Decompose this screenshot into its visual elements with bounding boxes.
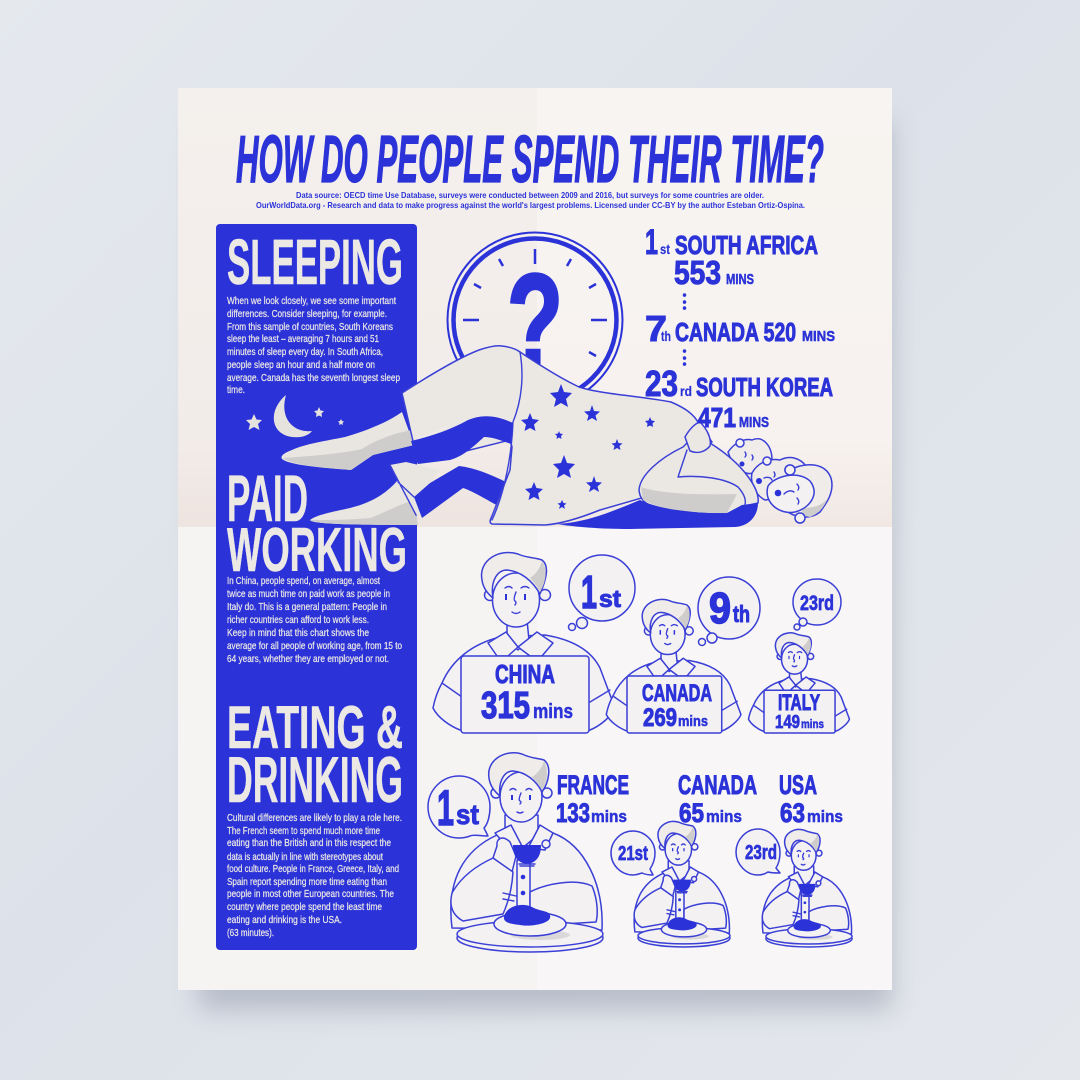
poster sheet (178, 88, 892, 990)
text block: paid working (227, 576, 402, 665)
ranking: sleeping (645, 223, 835, 433)
figure: italy worker: ITALY (778, 690, 820, 715)
text block: eating and drinking: (63 minutes). (227, 928, 274, 939)
panel: blue sidebar (216, 224, 417, 950)
lower trouser (412, 466, 508, 518)
text block: paid working: twice as much time on paid work as people in (227, 589, 390, 600)
figure: china worker: 315 (481, 685, 530, 727)
text block: paid working: Keep in mind that this chart shows the (227, 628, 369, 639)
figure: china worker: mins (533, 701, 573, 723)
poster shadow (198, 120, 892, 1010)
bubble: canada 9th: th (733, 601, 750, 627)
text block: sleeping: minutes of sleep every day. In South Africa, (227, 347, 383, 358)
text block: eating and drinking (227, 813, 402, 939)
rank 1 south africa (645, 223, 818, 291)
heading: paid working: PAID (227, 461, 308, 535)
rank 1 south africa: MINS (726, 271, 754, 288)
lower leg and foot (310, 480, 418, 525)
figure: usa eater (762, 829, 852, 947)
data source note: Data source: OECD time Use Database, surveys were conducted between 2009 and 2016, but surveys for some countries are older. (296, 190, 764, 200)
figure: canada eater (634, 821, 730, 947)
text block: sleeping: people sleep an hour and a half more on (227, 360, 375, 371)
illustration: sleeper under starry blanket (281, 346, 832, 529)
text block: paid working: In China, people spend, on average, almost (227, 576, 380, 587)
heading: paid working (227, 461, 407, 585)
label: usa: USA (779, 770, 817, 800)
figure: canada worker (606, 599, 741, 733)
rank 23 south korea: SOUTH KOREA (696, 372, 833, 402)
text block: eating and drinking: food culture. People in France, Greece, Italy, and (227, 864, 399, 875)
rank 23 south korea: rd (680, 383, 692, 399)
rank 23 south korea: MINS (739, 414, 769, 431)
label: france: 133 (556, 798, 590, 828)
label: canada: CANADA (678, 770, 757, 800)
upper trouser (411, 416, 513, 464)
arm and bent knee (639, 430, 758, 514)
figure: china worker (433, 552, 615, 733)
blanket (402, 346, 712, 525)
bubble: china 1st: 1 (581, 566, 597, 618)
bubble: france 1st: 1 (437, 780, 454, 836)
data source note (256, 190, 805, 210)
label: france: FRANCE (557, 770, 629, 800)
icon: clock with question mark (448, 232, 622, 408)
rank 23 south korea: 471 (698, 402, 736, 433)
figure: italy worker: 149 (775, 712, 800, 732)
rank 1 south africa: 553 (674, 254, 721, 291)
text block: paid working: 64 years, whether they are employed or not. (227, 654, 389, 665)
text block: eating and drinking: eating than the British and in this respect the (227, 838, 391, 849)
icon: moon and stars (246, 395, 344, 437)
back heads (728, 439, 808, 500)
label: usa (779, 770, 843, 828)
rank 7 canada: CANADA 520 (675, 317, 796, 347)
rank 23 south korea: 23 (645, 363, 678, 404)
text block: sleeping: differences. Consider sleeping, for example. (227, 309, 387, 320)
data source note: OurWorldData.org - Research and data to make progress against the world's largest problems. Licensed under CC-BY by the author Esteban Ortiz-Ospina. (256, 200, 805, 210)
rank 23 south korea (645, 363, 833, 433)
label: usa: 63 (780, 798, 805, 828)
text block: sleeping: From this sample of countries, South Koreans (227, 322, 393, 333)
figure: france eater (451, 753, 603, 952)
figure: italy worker (748, 633, 849, 733)
bubble: canada 9th: 9 (709, 584, 731, 633)
heading: sleeping: SLEEPING (227, 226, 403, 298)
figure: canada worker: CANADA (642, 680, 712, 707)
rank 7 canada (645, 308, 835, 349)
rank 7 canada: 7 (645, 308, 667, 349)
label: canada: mins (706, 807, 742, 826)
text block: paid working: richer countries can afford to work less. (227, 615, 369, 626)
bubble: italy 23rd: 23rd (800, 592, 834, 615)
figure: canada worker: 269 (643, 704, 677, 732)
heading: paid working: WORKING (227, 516, 407, 585)
blue lower clothing (557, 500, 758, 529)
figure: italy worker: mins (801, 717, 824, 731)
text block: eating and drinking: Spain report spending more time eating than (227, 877, 387, 888)
heading: eating and drinking: EATING & (227, 694, 403, 761)
text block: sleeping: average. Canada has the seventh longest sleep (227, 373, 400, 384)
bubble: china 1st: st (599, 586, 621, 613)
text block: eating and drinking: people in most other European countries. The (227, 889, 394, 900)
heading: eating and drinking (227, 694, 403, 816)
text block: eating and drinking: The French seem to spend much more time (227, 826, 380, 837)
heading: eating and drinking: DRINKING (227, 743, 403, 816)
label: france (556, 770, 629, 828)
text block: sleeping: When we look closely, we see some important (227, 296, 396, 307)
bubble: italy 23rd (793, 579, 841, 630)
text block: eating and drinking: country where people spend the least time (227, 902, 382, 913)
bubble: canada 21st: 21st (618, 843, 648, 865)
front head (767, 465, 832, 523)
text block: sleeping (227, 296, 400, 396)
text block: eating and drinking: Cultural differences are likely to play a role here. (227, 813, 402, 824)
dots (683, 351, 686, 364)
rank 7 canada: MINS (802, 328, 835, 345)
bubble: usa 23rd (736, 829, 780, 875)
text block: paid working: Italy do. This is a general pattern: People in (227, 602, 387, 613)
upper leg and foot (281, 412, 414, 470)
label: canada: 65 (679, 798, 704, 828)
bubble: france 1st: st (456, 799, 479, 830)
figure: canada worker: mins (678, 713, 708, 730)
text block: sleeping: sleep the least – averaging 7 hours and 51 (227, 334, 379, 345)
bubble: canada 21st (611, 831, 655, 875)
dots (683, 295, 686, 308)
label: usa: mins (807, 807, 843, 826)
bubble: china 1st (568, 555, 635, 630)
bubble: france 1st (428, 776, 490, 838)
label: canada (678, 770, 757, 828)
text block: eating and drinking: data is actually in line with stereotypes about (227, 852, 383, 863)
text block: paid working: average for all people of working age, from 15 to (227, 641, 402, 652)
text block: eating and drinking: eating and drinking is the USA. (227, 915, 342, 926)
bubble: usa 23rd: 23rd (745, 842, 777, 864)
rank 7 canada: th (661, 328, 671, 344)
figure: china worker: CHINA (495, 659, 555, 689)
icon: clock with question mark: ? (507, 246, 563, 397)
rank 1 south africa: SOUTH AFRICA (675, 230, 818, 260)
text block: sleeping: time. (227, 385, 245, 396)
bubble: canada 9th (698, 577, 760, 646)
label: france: mins (591, 807, 627, 826)
blanket stars (521, 384, 655, 509)
rank 1 south africa: st (660, 241, 670, 257)
rank 1 south africa: 1 (645, 223, 658, 262)
